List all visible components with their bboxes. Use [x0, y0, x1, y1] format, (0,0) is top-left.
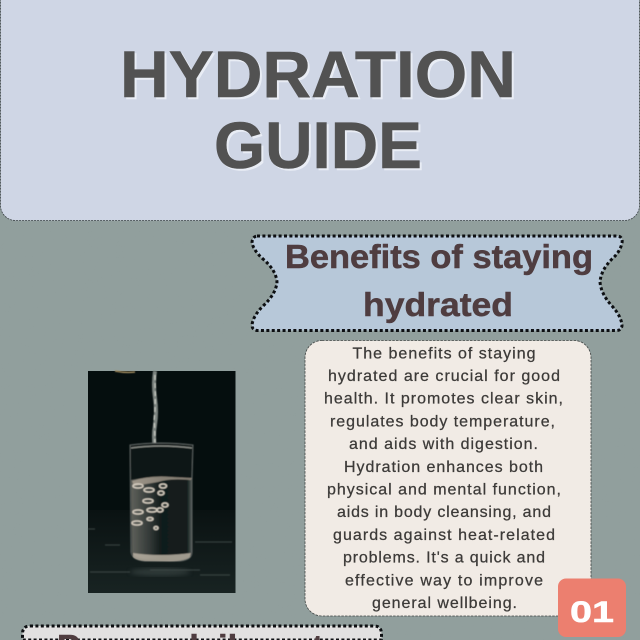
description text: general wellbeing.: [372, 595, 517, 612]
bubbles: [132, 484, 168, 530]
glass base: [133, 553, 191, 562]
photo: water pouring into a glass: [88, 371, 236, 593]
banner: next section heading, cropped at page bottom: [21, 624, 383, 640]
description text: effective way to improve: [345, 572, 543, 589]
dark table surface: [88, 510, 236, 593]
number badge 01: [558, 578, 626, 637]
title: GUIDE: [214, 108, 422, 182]
title: HYDRATION: [122, 39, 518, 113]
description text: regulates body temperature,: [330, 413, 555, 430]
glass body: [130, 443, 193, 561]
banner heading text: [285, 238, 593, 323]
spout glint: [115, 371, 135, 372]
text card: benefits description: [305, 340, 591, 616]
description text: problems. It's a quick and: [343, 550, 545, 567]
description text: health. It promotes clear skin,: [324, 391, 563, 408]
description text: Hydration enhances both: [344, 459, 543, 476]
description text: [324, 345, 563, 612]
description text: physical and mental function,: [327, 482, 561, 498]
table highlights: [88, 529, 232, 575]
ribbon banner: benefits heading: [252, 236, 622, 330]
description text: The benefits of staying: [352, 345, 536, 362]
title: HYDRATION: [120, 37, 516, 111]
glass reflection on table: [130, 568, 190, 576]
title: [120, 37, 518, 184]
badge number: 01: [570, 596, 614, 629]
water stream: [154, 371, 156, 470]
description text: and aids with digestion.: [349, 436, 538, 453]
title panel: [0, 0, 640, 220]
description text: hydrated are crucial for good: [328, 368, 560, 385]
description text: guards against heat-related: [333, 527, 555, 544]
description text: aids in body cleansing, and: [337, 504, 551, 521]
title: GUIDE: [216, 110, 424, 184]
glass rim: [131, 446, 192, 448]
banner heading text: hydrated: [363, 286, 513, 323]
banner heading text: Benefits of staying: [285, 238, 593, 275]
water surface glow: [132, 476, 192, 486]
water in glass: [131, 477, 192, 559]
